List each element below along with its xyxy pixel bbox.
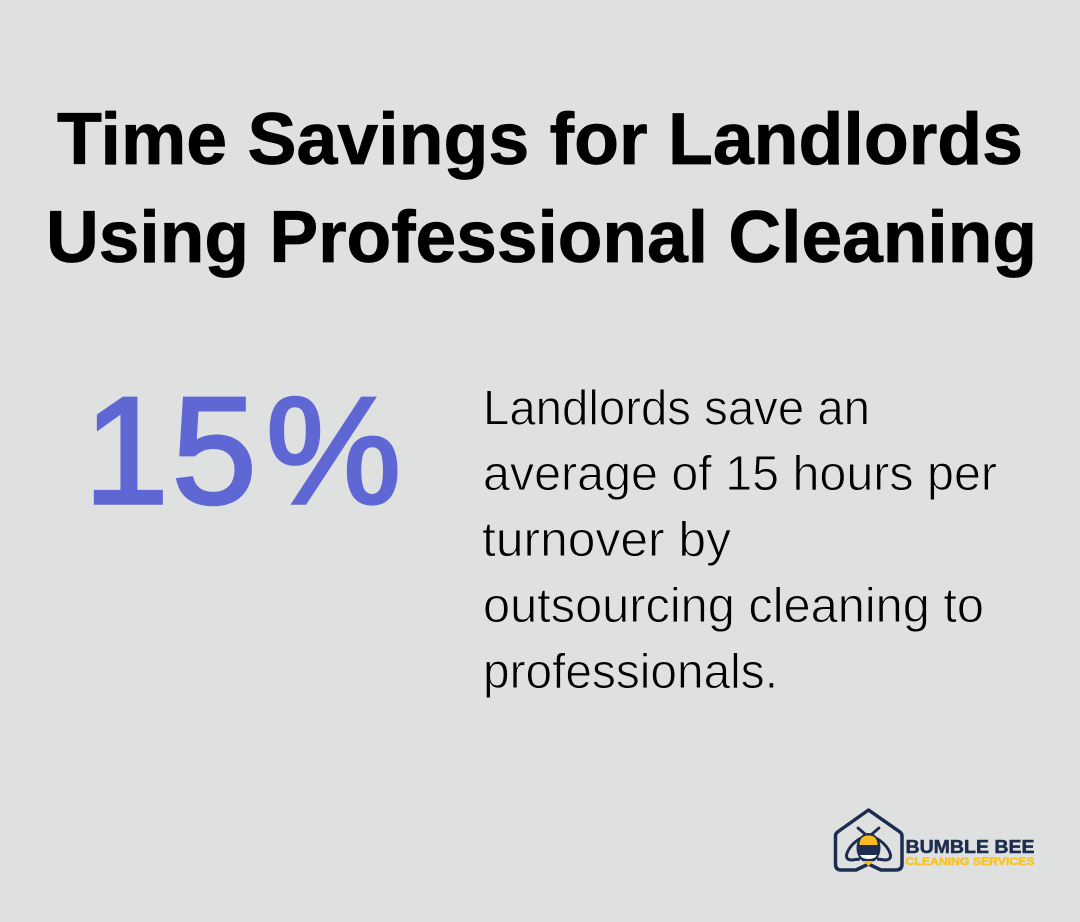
description text: professionals. — [483, 645, 778, 699]
description text: Landlords save an — [483, 382, 870, 436]
description text: average of 15 hours per — [483, 447, 997, 501]
description text — [482, 382, 997, 699]
logo tagline: CLEANING SERVICES — [906, 856, 1034, 868]
title: Time Savings for Landlords — [57, 99, 1023, 180]
logo: Bumble Bee Cleaning Services — [836, 810, 1034, 870]
logo wordmark: BUMBLE BEE — [906, 836, 1034, 857]
description text: turnover by — [482, 513, 732, 567]
icon: house outline — [836, 810, 902, 870]
description text: outsourcing cleaning to — [483, 579, 984, 633]
title: Using Professional Cleaning — [46, 197, 1037, 278]
big stat: 15%: 15% — [84, 366, 401, 536]
title — [46, 99, 1037, 278]
icon: bee — [846, 828, 891, 866]
